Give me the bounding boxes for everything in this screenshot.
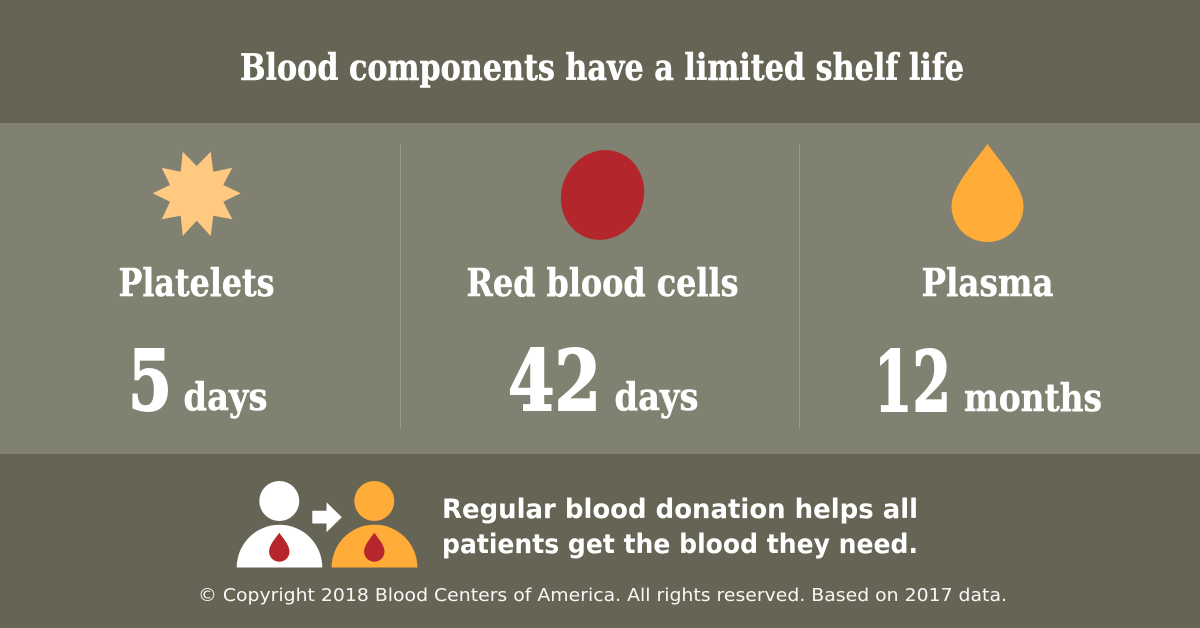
callout text	[442, 494, 918, 560]
stat: 42 days: 42	[508, 332, 601, 430]
heading: platelets: Platelets	[118, 260, 274, 305]
stat: 5 days: days	[184, 374, 268, 419]
stat: 5 days	[128, 332, 268, 430]
copyright footer: © Copyright 2018 Blood Centers of America. All rights reserved. Based on 2017 data.	[198, 585, 1007, 606]
title: Blood components have a limited shelf life	[240, 47, 964, 89]
icon: patient	[332, 481, 417, 568]
icon: donor	[237, 481, 322, 568]
callout text: patients get the blood they need.	[442, 529, 918, 560]
stat: 12 months	[874, 333, 1102, 431]
panel: red blood cells	[466, 137, 738, 430]
icon: platelet star	[153, 152, 241, 236]
stat: 12 months: months	[964, 375, 1102, 420]
stat: 5 days: 5	[128, 332, 172, 430]
icon: donor to patient	[237, 481, 417, 568]
heading: plasma: Plasma	[922, 260, 1054, 305]
panel: plasma	[874, 144, 1102, 431]
stat: 42 days: days	[614, 374, 698, 419]
panel: platelets	[118, 152, 274, 430]
panel: shelf life band	[0, 123, 1200, 454]
icon: red blood cell	[547, 137, 658, 253]
stat: 12 months: 12	[874, 333, 951, 431]
arrow	[312, 502, 342, 532]
callout text: Regular blood donation helps all	[442, 494, 918, 525]
heading: red blood cells: Red blood cells	[466, 260, 738, 305]
stat: 42 days	[508, 332, 698, 430]
icon: plasma drop	[952, 144, 1024, 242]
